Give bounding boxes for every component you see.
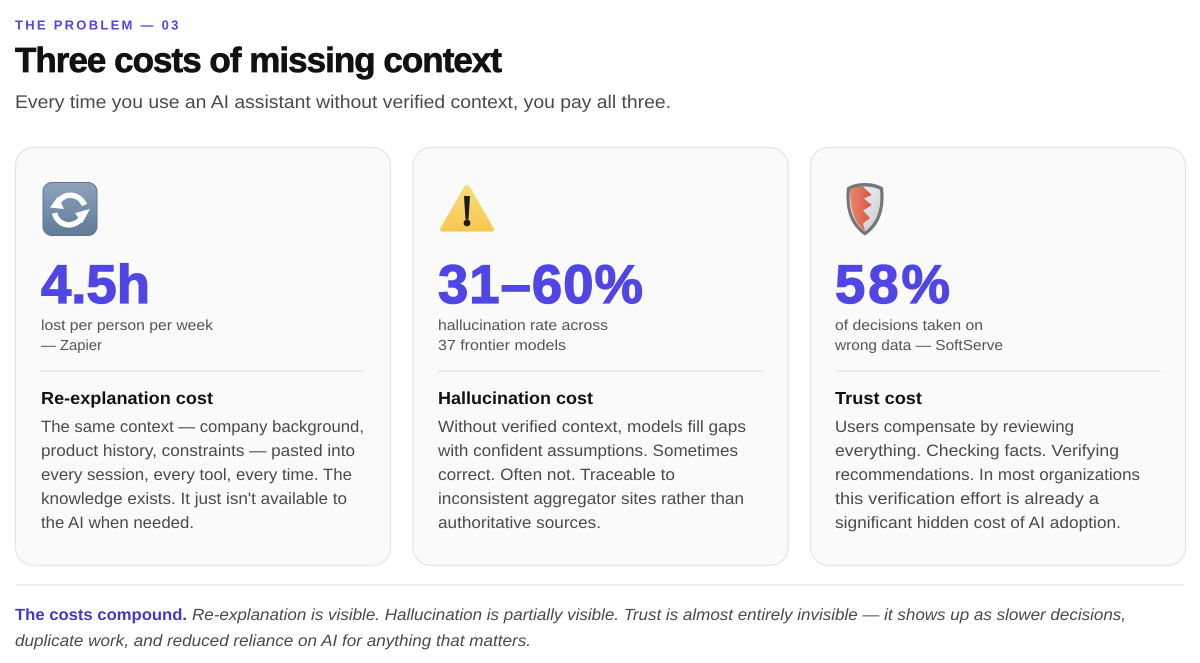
card body text: product history, constraints — pasted into	[41, 442, 355, 460]
card body text: knowledge exists. It just isn't available to	[41, 490, 347, 508]
title: Three costs of missing context	[15, 41, 502, 80]
stat: 4.5h: 4.5h	[41, 254, 150, 315]
stat description: wrong data — SoftServe	[834, 338, 1003, 354]
eyebrow label: THE PROBLEM — 03	[15, 18, 181, 32]
icon: shield	[846, 183, 884, 236]
card body text: with confident assumptions. Sometimes	[437, 442, 738, 460]
icon: repeat arrows	[43, 182, 97, 236]
card body text: this verification effort is already a	[835, 490, 1100, 508]
stat description: hallucination rate across	[438, 318, 608, 334]
panel: hallucination cost	[413, 148, 788, 566]
stat description: lost per person per week	[41, 318, 214, 334]
stat description: — Zapier	[41, 338, 102, 354]
panel: re-explanation cost	[16, 148, 390, 566]
stat description	[438, 318, 608, 354]
stat: 58%: 58%	[835, 254, 950, 315]
stat description	[41, 318, 214, 354]
card body text: the AI when needed.	[41, 514, 194, 532]
card heading: Re-explanation cost	[41, 388, 213, 408]
card body text: every session, every tool, every time. The	[41, 466, 352, 484]
card body text: inconsistent aggregator sites rather than	[438, 490, 744, 508]
card body text: The same context — company background,	[41, 418, 364, 436]
card body text: significant hidden cost of AI adoption.	[835, 514, 1121, 532]
card heading: Trust cost	[835, 388, 922, 408]
card body text	[437, 418, 746, 532]
panel: trust cost	[810, 148, 1186, 566]
stat description	[834, 318, 1003, 354]
card body text: everything. Checking facts. Verifying	[835, 442, 1119, 460]
card body text: correct. Often not. Traceable to	[438, 466, 675, 484]
stat description: 37 frontier models	[438, 338, 566, 354]
icon: warning triangle	[440, 185, 494, 232]
subtitle: Every time you use an AI assistant without verified context, you pay all three.	[15, 91, 671, 112]
stat description: of decisions taken on	[835, 318, 983, 334]
card body text: authoritative sources.	[438, 514, 601, 532]
footer callout: The costs compound.	[15, 606, 187, 624]
card body text: recommendations. In most organizations	[835, 466, 1140, 484]
card body text: Without verified context, models fill gaps	[438, 418, 746, 436]
footer callout: Re-explanation is visible. Hallucination is partially visible. Trust is almost entirely invisible — it shows up as slower decisions,	[192, 606, 1126, 624]
card body text: Users compensate by reviewing	[835, 418, 1074, 436]
card heading: Hallucination cost	[438, 388, 593, 408]
card body text	[835, 418, 1140, 532]
stat: 31–60%: 31–60%	[438, 254, 643, 315]
card body text	[41, 418, 364, 532]
footer callout	[15, 606, 1126, 650]
footer callout: duplicate work, and reduced reliance on AI for anything that matters.	[15, 632, 531, 650]
